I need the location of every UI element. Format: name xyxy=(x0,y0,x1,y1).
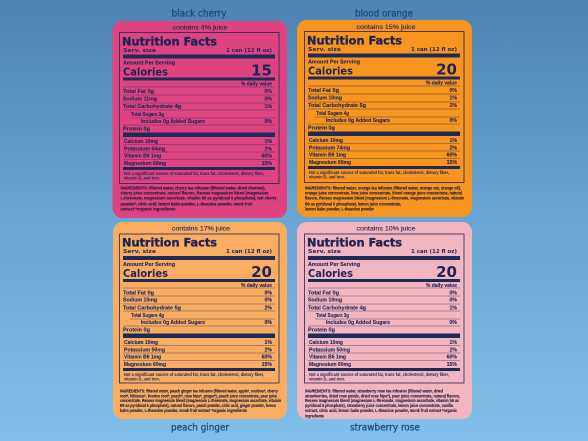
ingredients xyxy=(120,186,277,212)
nutrition label: Calories xyxy=(308,66,353,78)
ingredients: flavors, Recess magnesium blend (magnesium L-threonate, magnesium ascorbate, vitamin xyxy=(305,196,464,202)
panel background xyxy=(297,20,472,217)
ingredients: powder*, citric acid, lemon balm powder, L-theanine powder, monk fruit xyxy=(120,202,253,208)
nutrition label: 0% xyxy=(450,298,457,304)
nutrition label: Potassium 64mg xyxy=(124,146,165,152)
nutrition label: Vitamin B6 1mg xyxy=(309,152,346,158)
nutrition label: Not a significant source of saturated fat, trans fat, cholesterol, dietary fiber, xyxy=(309,170,449,175)
nutrition label xyxy=(304,234,464,383)
nutrition label: Total Carbohydrate 4g xyxy=(308,306,366,312)
nutrition label: 2% xyxy=(450,348,457,354)
nutrition label: Total Fat 0g xyxy=(308,290,339,296)
nutrition label: Total Sugars 4g xyxy=(131,313,164,319)
heading: strawberry rose: strawberry rose xyxy=(350,422,420,434)
nutrition label: Includes 0g Added Sugars xyxy=(326,118,390,124)
nutrition label: 1 can (12 fl oz) xyxy=(226,48,272,54)
panel background xyxy=(112,21,287,218)
nutrition label: Includes 0g Added Sugars xyxy=(326,320,390,326)
heading: blood orange: blood orange xyxy=(355,8,413,20)
heading: peach ginger: peach ginger xyxy=(171,422,230,434)
ingredients: orange juice concentrate, lime juice concentrate, blood orange juice concentrate, natural xyxy=(305,190,462,196)
nutrition label: 2% xyxy=(264,348,272,354)
nutrition label: Nutrition Facts xyxy=(307,236,402,250)
nutrition label: 1 can (12 fl oz) xyxy=(226,249,272,255)
nutrition label: Magnesium 60mg xyxy=(309,160,351,166)
nutrition label: 20 xyxy=(436,60,457,78)
panel: blood orange xyxy=(297,8,472,217)
nutrition label: vitamin D, and iron. xyxy=(124,376,160,382)
nutrition label: 60% xyxy=(262,154,272,160)
ingredients: concentrate, Recess magnesium blend (magnesium L-threonate, magnesium ascorbate, vitamin xyxy=(120,398,281,404)
nutrition label: Nutrition Facts xyxy=(122,236,217,250)
nutrition label: Calcium 10mg xyxy=(309,138,343,144)
nutrition label: Vitamin B6 1mg xyxy=(124,154,161,160)
nutrition label: Total Carbohydrate 5g xyxy=(123,306,181,312)
panel: peach ginger xyxy=(113,222,287,434)
nutrition label: Sodium 10mg xyxy=(123,298,157,304)
nutrition label: Protein 0g xyxy=(123,126,150,132)
nutrition label: 0% xyxy=(450,320,457,326)
nutrition label: Includes 0g Added Sugars xyxy=(141,320,205,326)
nutrition label: 15% xyxy=(262,362,272,368)
nutrition label: 1% xyxy=(450,138,457,144)
nutrition label: % daily value xyxy=(426,80,457,86)
nutrition label: 60% xyxy=(262,354,272,360)
nutrition label: Total Fat 0g xyxy=(123,290,154,296)
heading: black cherry: black cherry xyxy=(172,8,227,20)
nutrition label: % daily value xyxy=(241,283,272,289)
nutrition label: Magnesium 60mg xyxy=(309,362,351,368)
nutrition label: Total Fat 0g xyxy=(308,88,339,94)
nutrition label: Serv. size xyxy=(123,249,156,255)
ingredients xyxy=(305,186,464,212)
nutrition label: 20 xyxy=(251,263,272,281)
nutrition label: Calcium 10mg xyxy=(124,139,158,145)
nutrition label: Includes 0g Added Sugars xyxy=(141,119,205,125)
nutrition label: Calories xyxy=(123,268,168,280)
nutrition label: 2% xyxy=(264,306,272,312)
ingredients: cherry juice concentrate, natural flavors, Recess magnesium blend (magnesium xyxy=(120,190,269,196)
nutrition label: Calcium 10mg xyxy=(124,340,158,346)
nutrition label: Sodium 10mg xyxy=(308,298,342,304)
nutrition label: 0% xyxy=(450,88,457,94)
ingredients: extract *organic ingredients xyxy=(120,206,176,212)
panel: black cherry xyxy=(112,8,287,218)
ingredients xyxy=(120,388,281,414)
nutrition label: 1 can (12 fl oz) xyxy=(411,47,457,53)
ingredients: INGREDIENTS: filtered water, strawberry rose tea infusion (filtered water, dried xyxy=(305,388,443,394)
nutrition label: Serv. size xyxy=(308,47,341,53)
ingredients xyxy=(305,388,460,420)
ingredients: strawberries, dried rose petals, dried rose hips*), pear juice concentrate, natural flavors, xyxy=(305,394,460,400)
nutrition label xyxy=(304,32,464,182)
nutrition label: 60% xyxy=(447,354,457,360)
nutrition label: Serv. size xyxy=(123,48,156,54)
nutrition label: 1% xyxy=(450,96,457,102)
ingredients: INGREDIENTS: filtered water, cherry tea infusion (filtered water, dried cherries), xyxy=(120,186,266,192)
nutrition label: Magnesium 60mg xyxy=(124,362,166,368)
nutrition label: 1% xyxy=(450,340,457,346)
ingredients: ingredients xyxy=(305,414,324,420)
panel: strawberry rose xyxy=(297,222,472,434)
nutrition label xyxy=(120,234,279,383)
ingredients: B6 as pyridoxal 5 phosphate), natural flavors, peach powder, citric acid, ginger powder, lemon xyxy=(120,403,276,409)
juice content: contains 4% juice xyxy=(172,24,228,32)
ingredients: extract, citric acid, lemon balm powder, L-theanine powder, monk fruit extract *organic xyxy=(305,408,457,414)
ingredients: INGREDIENTS: filtered water, orange tea infusion (filtered water, orange oat, orange oil), xyxy=(305,186,461,192)
nutrition label: Total Fat 0g xyxy=(123,89,154,95)
juice content: contains 15% juice xyxy=(356,24,416,31)
nutrition label: 60% xyxy=(447,152,457,158)
nutrition label: 0% xyxy=(264,89,272,95)
ingredients: B6 as pyridoxal 5 phosphate), lemon juice concentrate, xyxy=(305,202,401,208)
nutrition label: Sodium 10mg xyxy=(308,96,342,102)
panel background xyxy=(113,222,287,419)
nutrition label: Not a significant source of saturated fat, trans fat, cholesterol, dietary fiber, xyxy=(124,372,264,377)
ingredients: root*, hibiscus*, licorice root*, peach*, rose hips*, ginger*), peach juice concentrate, pear juice xyxy=(120,394,277,400)
nutrition label: vitamin D, and iron. xyxy=(124,176,160,180)
nutrition label: Serv. size xyxy=(308,249,341,255)
nutrition label: 0% xyxy=(264,96,272,102)
nutrition label: Not a significant source of saturated fat, trans fat, cholesterol, dietary fiber, xyxy=(309,372,449,377)
nutrition label: 0% xyxy=(264,298,272,304)
nutrition label: 1 can (12 fl oz) xyxy=(411,249,457,255)
nutrition label: 2% xyxy=(450,146,457,152)
nutrition label: % daily value xyxy=(426,283,457,289)
nutrition label: Amount Per Serving xyxy=(308,60,360,66)
nutrition label: Calories xyxy=(308,268,353,280)
nutrition label: 0% xyxy=(264,290,272,296)
nutrition label: 2% xyxy=(450,103,457,109)
nutrition label: Total Sugars 4g xyxy=(316,111,349,117)
nutrition label: Potassium 50mg xyxy=(309,348,350,354)
nutrition label: 15% xyxy=(447,160,457,166)
nutrition label: 15% xyxy=(447,362,457,368)
nutrition label: Nutrition Facts xyxy=(307,34,402,48)
nutrition label: Amount Per Serving xyxy=(123,262,175,268)
nutrition label: Amount Per Serving xyxy=(123,60,175,66)
juice content: contains 17% juice xyxy=(172,226,230,232)
ingredients: Recess magnesium blend (magnesium L-threonate, magnesium ascorbate, vitamin b6 as xyxy=(305,398,459,404)
ingredients: INGREDIENTS: filtered water, peach ginger tea infusion (filtered water, apple*, rooibos*, cherry xyxy=(120,388,278,394)
nutrition label: 1% xyxy=(264,340,272,346)
nutrition label: Calcium 10mg xyxy=(309,340,343,346)
nutrition label: Amount Per Serving xyxy=(308,262,360,268)
nutrition label: Vitamin B6 1mg xyxy=(124,354,161,360)
ingredients: lemon balm powder, L-theanine powder xyxy=(305,206,374,212)
nutrition label: 20 xyxy=(436,263,457,281)
nutrition label: Potassium 74mg xyxy=(309,146,350,152)
nutrition label: 0% xyxy=(264,320,272,326)
nutrition label: Protein 0g xyxy=(308,328,335,334)
nutrition label: 1% xyxy=(264,139,272,145)
juice content: contains 10% juice xyxy=(356,226,416,232)
nutrition label: Total Sugars 3g xyxy=(316,313,349,319)
nutrition label: Magnesium 60mg xyxy=(124,161,166,167)
nutrition label: 0% xyxy=(450,290,457,296)
nutrition label: 0% xyxy=(264,119,272,125)
nutrition label: Nutrition Facts xyxy=(122,34,217,48)
nutrition label: vitamin D, and iron. xyxy=(309,376,345,382)
nutrition label: 15 xyxy=(251,62,272,80)
ingredients: L-threonate, magnesium ascorbate, vitamin b6 as pyridoxal 5 phosphate), tart cherry xyxy=(120,196,277,202)
nutrition label: Total Sugars 3g xyxy=(131,112,164,118)
nutrition label: Vitamin B6 1mg xyxy=(309,354,346,360)
nutrition label: Not a significant source of saturated fat, trans fat, cholesterol, dietary fiber, xyxy=(124,171,264,176)
nutrition label: Total Carbohydrate 4g xyxy=(123,104,181,110)
nutrition label xyxy=(120,32,279,184)
panel background xyxy=(297,222,472,419)
nutrition label: 15% xyxy=(262,161,272,167)
nutrition label: 1% xyxy=(264,104,272,110)
nutrition label: vitamin D, and iron. xyxy=(309,174,345,180)
ingredients: balm powder, L-theanine powder, monk fruit extract *organic ingredients xyxy=(120,408,247,414)
nutrition label: Protein 0g xyxy=(123,328,150,334)
nutrition label: 0% xyxy=(450,118,457,124)
nutrition label: 1% xyxy=(450,306,457,312)
nutrition label: 2% xyxy=(264,146,272,152)
nutrition label: Sodium 11mg xyxy=(123,96,157,102)
nutrition label: Protein 0g xyxy=(308,126,335,132)
nutrition label: Calories xyxy=(123,66,168,78)
ingredients: pyridoxal 5 phosphate), strawberry juice concentrate, lemon juice concentrate, vanilla xyxy=(305,403,453,409)
nutrition label: % daily value xyxy=(241,82,272,88)
nutrition label: Potassium 50mg xyxy=(124,348,165,354)
nutrition label: Total Carbohydrate 5g xyxy=(308,103,366,109)
